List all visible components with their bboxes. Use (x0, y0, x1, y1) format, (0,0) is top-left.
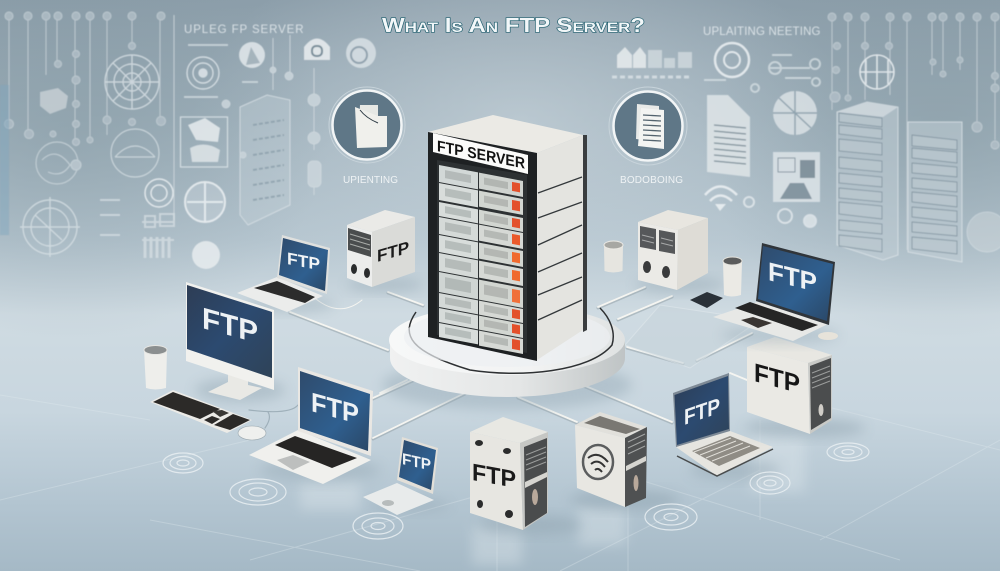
tower front (428, 132, 537, 361)
ripple icons (163, 443, 869, 539)
bar icons top right (612, 47, 692, 77)
laptop FTP text: FTP (311, 386, 359, 430)
laptop center right (673, 373, 780, 480)
tower top face (428, 115, 583, 153)
grid globe (185, 182, 225, 222)
phone (690, 292, 723, 308)
laptop center left (249, 367, 380, 484)
box server with wifi icon (570, 412, 680, 510)
drive row 7 (439, 272, 523, 308)
floor reflections (300, 432, 805, 565)
picture card (773, 152, 820, 202)
rack 2 (908, 122, 962, 262)
box server top right (635, 210, 725, 293)
small glyph cluster right (704, 55, 820, 92)
left rack outline (240, 95, 290, 225)
white circle icon bottom (192, 241, 220, 269)
drive row 5 (439, 235, 523, 268)
coffee cup right (723, 257, 742, 296)
mouse right (818, 332, 838, 340)
monitor shell (186, 282, 274, 390)
platform shadow (382, 360, 632, 410)
coffee cup left (144, 346, 167, 390)
box FTP text: FTP (377, 237, 409, 266)
drive rows (439, 165, 523, 354)
inner bay (437, 160, 527, 353)
label plate (433, 133, 528, 174)
small circles right (744, 197, 816, 227)
box server top left (347, 210, 423, 292)
ripple 3 (353, 513, 403, 539)
ripple 2 (230, 479, 286, 505)
monitor FTP text: FTP (202, 301, 258, 350)
wifi emblem (583, 445, 613, 479)
document sheet (707, 95, 750, 177)
small glyph clusters (100, 45, 258, 258)
mouse (238, 426, 266, 440)
left edge data strip (0, 85, 9, 235)
box server right (745, 337, 865, 438)
keyboard (150, 390, 252, 433)
drive row 10 (439, 323, 523, 354)
drive row 9 (439, 308, 523, 338)
pie circle (773, 91, 817, 135)
platform ring (409, 308, 613, 373)
arrow keys (204, 416, 220, 424)
platform top (389, 305, 625, 375)
FTP SERVER label: FTP SERVER (437, 138, 525, 173)
right grid globe (860, 55, 894, 89)
radar circle top (105, 55, 159, 109)
picture box (180, 117, 228, 167)
right edge shading (700, 0, 1000, 340)
FTP server tower (428, 115, 587, 361)
ripple 6 (827, 443, 869, 461)
background panel: left UI schematics (0, 12, 1000, 269)
floor sheet (625, 305, 760, 368)
far right blob icon (967, 212, 1000, 252)
concentric circle icon (187, 57, 219, 89)
tablet FTP text: FTP (402, 450, 431, 474)
server platform (382, 305, 632, 410)
ripple 4 (645, 504, 697, 530)
download label: BODOBOING (620, 175, 683, 186)
laptop FTP text: FTP (684, 393, 720, 430)
left vertical node lines (4, 12, 166, 146)
box server center front (470, 417, 582, 535)
left edge shading (0, 0, 330, 340)
network cables (249, 287, 752, 439)
small lines and nodes near left rack (174, 15, 321, 220)
upper nav keys (212, 410, 229, 417)
small left label: UPLEG FP SERVER (184, 24, 304, 36)
drive row 6 (439, 253, 523, 287)
background glow (190, 0, 850, 310)
download icon circle (609, 87, 687, 165)
box shadow (347, 278, 423, 292)
wifi icon (705, 186, 737, 211)
ripple 5 (750, 472, 790, 494)
swirl circle (36, 142, 81, 184)
tower side face (537, 135, 583, 360)
monitor stand (208, 370, 262, 400)
platform base (390, 340, 625, 397)
side shelf lines (538, 177, 582, 320)
floor tile lines (0, 395, 1000, 571)
concentric icon right (715, 43, 749, 77)
drive row 4 (439, 217, 523, 250)
laptop top left (237, 235, 334, 313)
drive row 3 (439, 202, 523, 232)
title: What Is An FTP Server? (382, 15, 645, 37)
drive row 2 (439, 183, 523, 216)
box vents (348, 228, 371, 257)
laptop FTP text: FTP (768, 256, 817, 298)
upload label: UPIENTING (343, 175, 398, 186)
desktop monitor (186, 282, 285, 402)
numpad keys (214, 414, 250, 430)
icon row top (239, 38, 376, 68)
rack 1 (837, 102, 898, 260)
right vertical node lines (828, 13, 999, 250)
upload icon circle (329, 87, 405, 163)
main keys (153, 392, 220, 419)
laptop top right (713, 243, 838, 344)
box FTP text: FTP (472, 459, 516, 494)
target circle (145, 179, 173, 207)
box FTP text: FTP (754, 357, 800, 399)
monitor screen (187, 285, 272, 378)
dome circle (111, 129, 159, 177)
laptop FTP text: FTP (287, 248, 320, 274)
drive row 1 (439, 165, 523, 198)
drive row 8 (439, 293, 523, 323)
radar circle bottom (20, 197, 80, 257)
blob icon (40, 88, 68, 114)
side edge (583, 135, 587, 332)
right top label: UPLAITING NEETING (703, 26, 821, 38)
ripple 1 (163, 453, 203, 473)
coffee cup center (604, 241, 623, 272)
small tablet laptop (363, 437, 450, 515)
